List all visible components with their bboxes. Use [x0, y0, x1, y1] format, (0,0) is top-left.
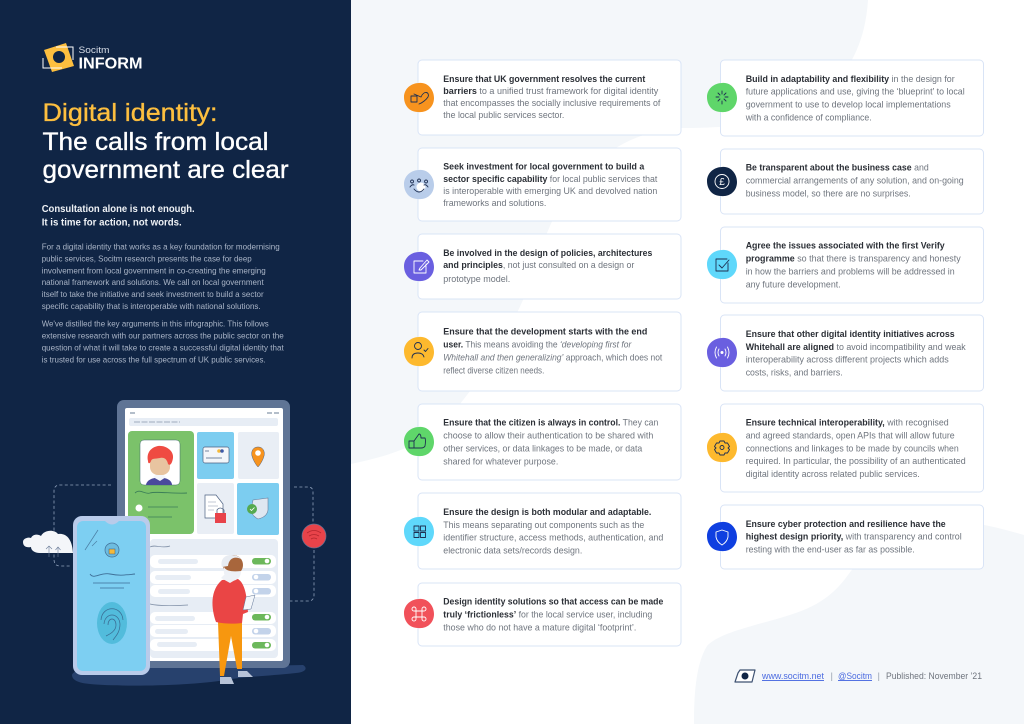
card: adaptability and flexibility: [707, 60, 984, 136]
card text: [745, 74, 965, 123]
second paragraph: We've distilled the key arguments in this infographic. This follows: [42, 319, 269, 329]
card text: digital identity across related public services.: [746, 469, 920, 479]
card text: highest design priority, with transparency and control: [746, 532, 962, 542]
card text: business model, so there are no surprises.: [746, 188, 911, 198]
card text: Ensure that other digital identity initiatives across: [746, 329, 955, 339]
lock badge: [105, 543, 119, 557]
card text: government to use to develop local implementations: [746, 100, 951, 110]
card text: [746, 163, 964, 198]
card: Whitehall initiatives aligned: [707, 315, 984, 391]
card text: [443, 507, 663, 556]
panel: left navy sidebar: [0, 0, 351, 724]
card text: prototype model.: [443, 274, 510, 284]
card text: Build in adaptability and flexibility in the design for: [746, 74, 955, 84]
card text: reflect diverse citizen needs.: [443, 365, 544, 375]
card: involved in design: [404, 234, 681, 299]
second paragraph: extensive research with our partners across the public sector on the: [42, 331, 284, 341]
footer: www.socitm.net: [761, 671, 824, 682]
card text: programme so that there is transparency and honesty: [746, 253, 961, 263]
footer: Published: November ’21: [886, 671, 982, 682]
card: start with the end user: [404, 312, 681, 391]
card text: any future development.: [746, 279, 841, 289]
tile: ID card: [197, 432, 234, 479]
card text: Ensure the design is both modular and adaptable.: [443, 507, 651, 517]
icon: checkbox: [707, 250, 737, 279]
tile: locked document: [197, 483, 234, 534]
icon: pound coin: [707, 167, 737, 196]
title: Digital identity:: [42, 99, 217, 127]
icon: command symbol: [404, 599, 434, 628]
card text: [746, 329, 966, 378]
card text: interoperability across different projects which adds: [746, 355, 949, 365]
second paragraph: [42, 319, 284, 364]
card text: shared for whatever purpose.: [443, 456, 558, 466]
card text: identifier structure, access methods, authentication, and: [443, 533, 663, 543]
card: resolve trust framework barriers: [404, 60, 681, 135]
card text: [443, 418, 658, 466]
card text: [443, 327, 663, 375]
card text: Whitehall are aligned to avoid incompatibility and weak: [746, 342, 966, 352]
intro paragraph: national framework and solutions. We call on local government: [42, 277, 264, 287]
card text: truly ‘frictionless’ for the local service user, including: [443, 610, 652, 620]
tile: map pin: [238, 432, 279, 479]
dashed connectors: [54, 485, 314, 601]
intro paragraph: For a digital identity that works as a key foundation for modernising: [42, 242, 280, 252]
card text: Ensure that UK government resolves the current: [443, 74, 645, 84]
illustration: devices and user: [23, 400, 326, 686]
subheading: Consultation alone is not enough.: [42, 204, 195, 215]
title: The calls from local: [42, 128, 268, 156]
subheading: It is time for action, not words.: [42, 218, 182, 228]
sweater: [212, 579, 248, 624]
card text: [443, 248, 652, 284]
card: sector specific capability: [404, 148, 681, 221]
card text: [746, 418, 966, 479]
intro paragraph: involvement from local government in co-creating the emerging: [42, 265, 266, 275]
card text: that encompasses the socially inclusive requirements of: [443, 98, 661, 108]
footer: |: [830, 671, 833, 682]
card text: Be involved in the design of policies, architectures: [443, 248, 652, 258]
phone: [73, 516, 150, 675]
card text: Ensure technical interoperability, with recognised: [746, 418, 949, 428]
card text: frameworks and solutions.: [443, 198, 546, 208]
card text: sector specific capability for local public services that: [443, 174, 658, 184]
icon: cloud: [23, 531, 73, 557]
title: [42, 99, 288, 184]
card text: Ensure that the development starts with the end: [443, 327, 648, 337]
card text: and agreed standards, open APIs that will allow future: [746, 430, 955, 440]
card text: connections and linkages to be made by councils when: [746, 443, 959, 453]
card text: [746, 241, 961, 289]
handheld phone: [243, 595, 255, 610]
avatar: [146, 446, 173, 485]
card text: required. In particular, the possibility of an authenticated: [746, 456, 966, 466]
intro paragraph: itself to take the initiative and seek investment to build a sector: [42, 289, 264, 299]
footer: @Socitm: [838, 671, 872, 682]
intro paragraph: specific capability that is interoperable with national solutions.: [42, 301, 261, 311]
card text: with a confidence of compliance.: [745, 113, 872, 123]
card text: Whitehall and then generalizing’ approach, which does not: [443, 352, 663, 362]
card text: Agree the issues associated with the first Verify: [746, 241, 945, 251]
icon: gear: [707, 433, 737, 462]
card text: the local public services sector.: [443, 110, 564, 120]
icon: people and pound: [404, 170, 434, 199]
search bar: [129, 418, 278, 426]
card text: [443, 597, 663, 632]
card text: commercial arrangements of any solution, and on-going: [746, 176, 964, 186]
person holding phone: [212, 555, 255, 684]
icon: grid: [404, 517, 434, 546]
icon: Socitm eye logo: [735, 670, 755, 682]
intro paragraph: public services, Socitm research presents the case for deep: [42, 253, 252, 263]
card text: and principles, not just consulted on a design or: [443, 260, 634, 270]
card text: barriers to a unified trust framework for digital identity: [443, 86, 659, 96]
legs: [218, 622, 242, 676]
icon: loader burst: [707, 83, 737, 112]
profile card: [128, 431, 194, 534]
collar: [221, 575, 240, 583]
card: technical interoperability: [707, 404, 984, 492]
card text: in how the barriers and problems will be addressed in: [746, 266, 955, 276]
card: modular and adaptable: [404, 493, 681, 569]
intro paragraph: [42, 242, 280, 311]
logo: Socitm Inform: INFORM: [78, 56, 142, 72]
icon: shield: [707, 522, 737, 551]
card text: user. This means avoiding the ‘developing first for: [443, 339, 632, 349]
title: government are clear: [42, 156, 288, 184]
logo: Socitm Inform: [43, 43, 142, 72]
fingerprint: [97, 602, 127, 644]
card: citizen in control: [404, 404, 681, 480]
card text: Be transparent about the business case and: [746, 163, 929, 173]
icon: user check: [404, 337, 434, 366]
card text: [443, 162, 658, 208]
card text: resting with the end-user as far as possible.: [746, 545, 915, 555]
card: cyber protection: [707, 505, 984, 569]
card text: costs, risks, and barriers.: [746, 368, 843, 378]
icon: wifi signal: [302, 524, 326, 548]
card text: Design identity solutions so that access can be made: [443, 597, 663, 607]
card text: Ensure cyber protection and resilience have the: [746, 519, 946, 529]
card text: [443, 74, 661, 120]
shoes: [220, 671, 253, 684]
logo: Socitm Inform: Socitm: [78, 45, 110, 56]
card text: Seek investment for local government to build a: [443, 162, 645, 172]
card text: electronic data sets/records design.: [443, 546, 582, 556]
card text: future applications and use, giving the ‘blueprint’ to local: [746, 87, 965, 97]
settings panel with toggles: [150, 539, 278, 658]
second paragraph: question of what it will take to create a successful digital identity that: [42, 342, 284, 352]
card text: This means separating out components such as the: [443, 520, 644, 530]
icon: pound coin: £: [719, 177, 725, 188]
footer: [735, 670, 982, 682]
footer: |: [878, 671, 880, 682]
card: transparent business case: [707, 149, 984, 214]
card text: [746, 519, 962, 555]
tile: shield: [237, 483, 279, 535]
subheading: [42, 204, 195, 228]
second paragraph: is trusted for use across the full spectrum of UK public services.: [42, 354, 266, 364]
icon: logo mark: [43, 43, 74, 72]
card text: is interoperable with emerging UK and devolved nation: [443, 186, 657, 196]
icon: thumbs up: [404, 427, 434, 456]
card text: other services, or data linkages to be made, or data: [443, 443, 643, 453]
card text: those who do not have a mature digital ‘footprint’.: [443, 622, 636, 632]
tablet: [117, 400, 290, 668]
card: frictionless access: [404, 583, 681, 646]
ground shadow: [72, 665, 306, 686]
card text: Ensure that the citizen is always in control. They can: [443, 418, 658, 428]
head: [223, 555, 243, 575]
icon: broadcast: [707, 338, 737, 367]
card: first Verify programme: [707, 227, 984, 303]
card text: choose to allow their authentication to be shared with: [443, 431, 653, 441]
icon: heart and lock: [404, 83, 434, 112]
icon: edit: [404, 252, 434, 281]
